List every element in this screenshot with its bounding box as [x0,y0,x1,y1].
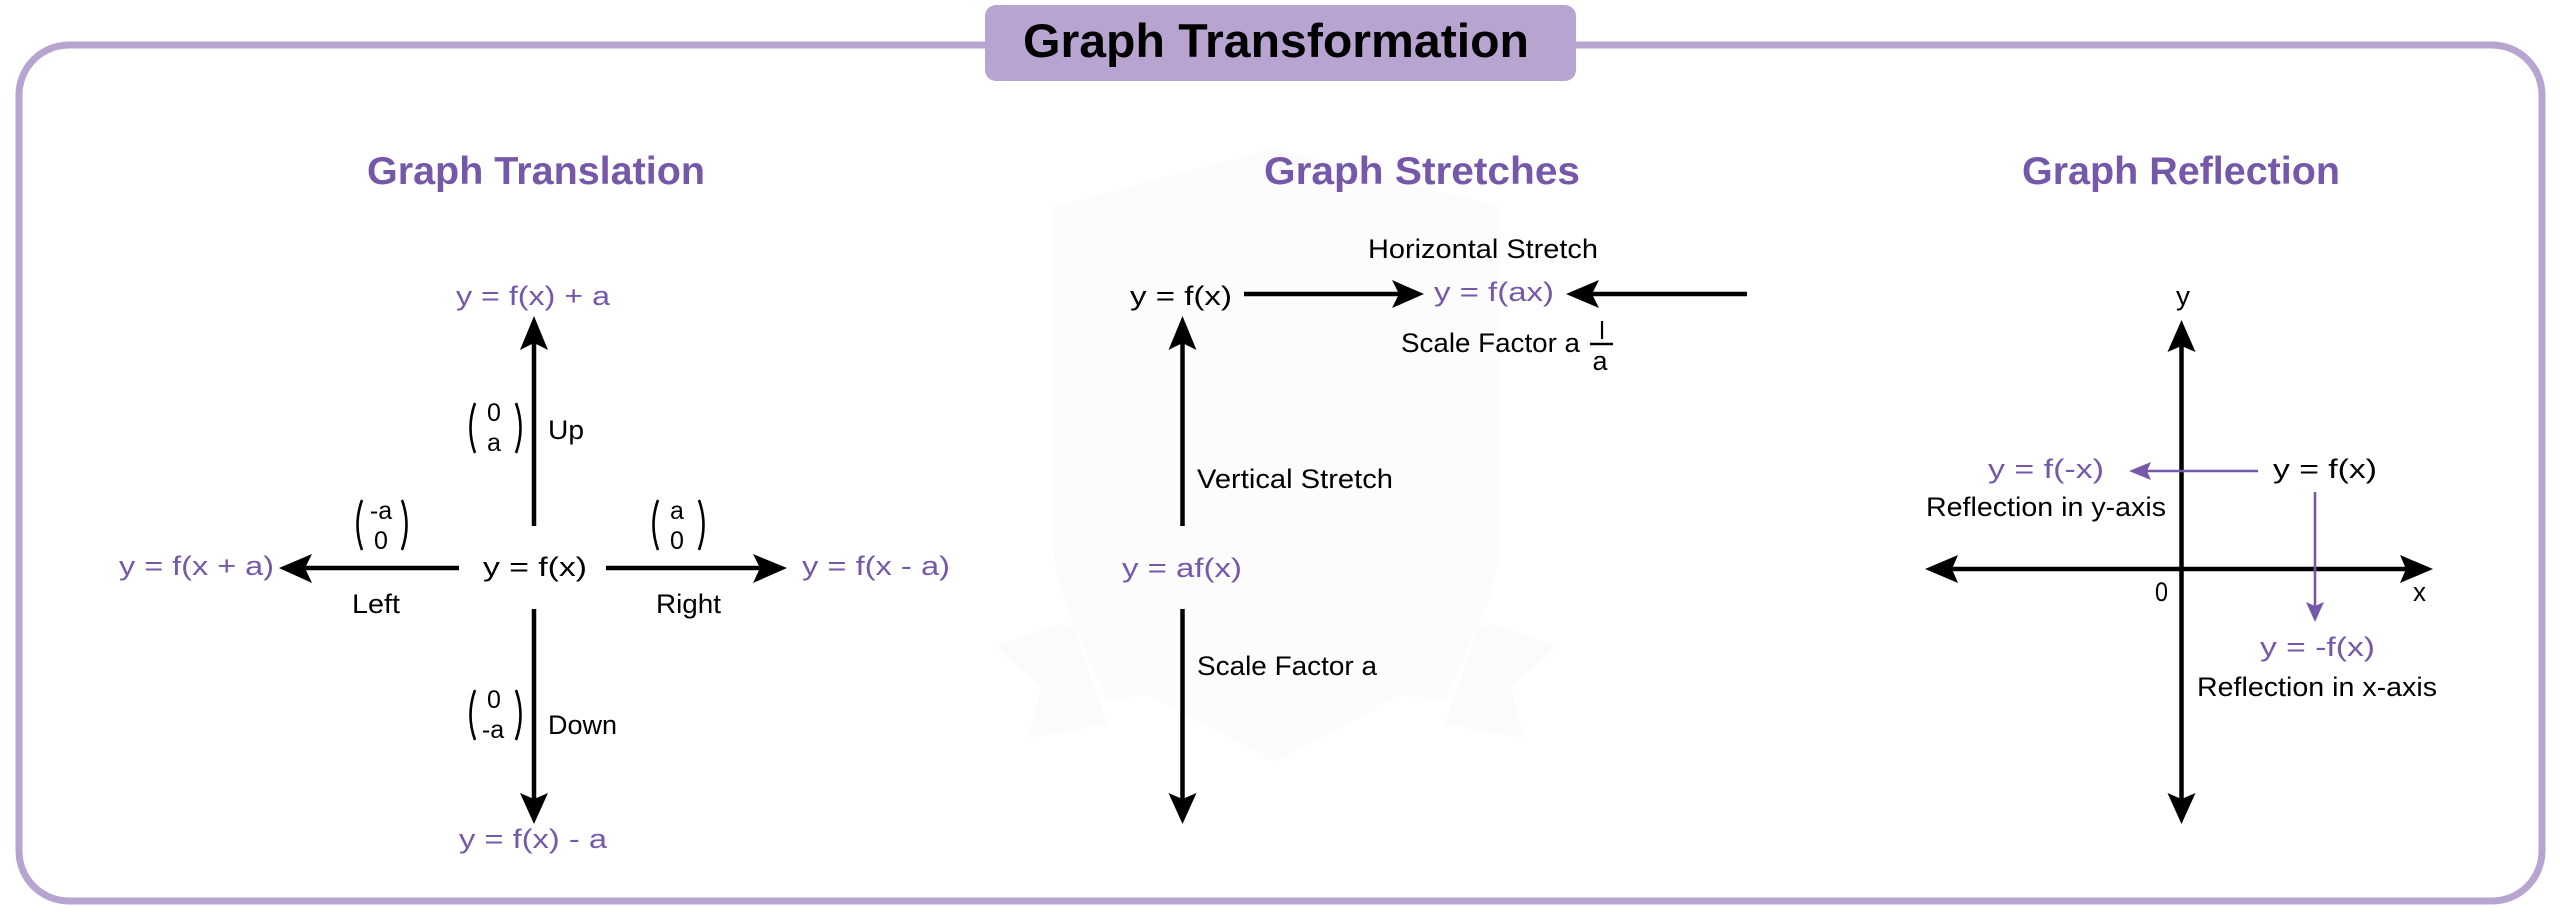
label: scale factor a: Scale Factor a [1197,651,1378,681]
axis label x: x [2413,577,2426,607]
title banner: Graph Transformation [1023,14,1529,67]
vector left [358,497,406,555]
arrow left [279,554,459,583]
x reflection result: y = -f(x) [2260,632,2375,662]
heading: graph reflection: Graph Reflection [2022,150,2340,193]
axis label y: y [2176,281,2191,311]
y reflection result: y = f(-x) [1988,454,2104,484]
heading: graph stretches: Graph Stretches [1264,150,1580,193]
arrow up to source [1168,316,1196,526]
vertical stretch result: y = af(x) [1122,553,1242,583]
vector up: a [487,429,501,457]
label: scale factor 1/a: Scale Factor a [1401,328,1581,358]
watermark shield [996,148,1556,762]
vector right [654,497,704,555]
origin label: 0 [2155,577,2168,607]
label: reflection in x-axis: Reflection in x-axis [2197,672,2437,702]
vector down: -a [482,716,504,744]
y axis [2168,320,2196,824]
label: horizontal stretch: Horizontal Stretch [1368,234,1598,264]
title banner [985,5,1576,81]
arrow left to horizontal stretch [1566,280,1747,308]
vector left: 0 [374,527,388,555]
x axis [1925,555,2433,583]
purple arrow to y reflection [2129,462,2258,480]
vector right: 0 [670,527,684,555]
label: vertical stretch: Vertical Stretch [1197,464,1393,494]
label: scale factor 1/a [1401,317,1613,376]
panel: graph translation [119,150,950,854]
label: scale factor 1/a: l [1599,317,1605,345]
label: scale factor 1/a: a [1592,346,1608,376]
vector left: -a [370,497,392,525]
centre label: y = f(x) [483,552,587,582]
label: right: Right [656,589,722,619]
vector up [470,399,520,457]
vector up: 0 [487,399,501,427]
source label: y = f(x) [1130,281,1232,311]
source label: y = f(x) [2273,454,2377,484]
horizontal stretch result: y = f(ax) [1434,277,1554,307]
panel: graph reflection [1925,150,2437,824]
arrow down [1168,609,1196,824]
arrow right [606,554,787,583]
label: up: Up [548,415,584,445]
vector right: a [670,497,684,525]
label: down: Down [548,710,617,740]
panel: graph stretches [1122,150,1747,824]
label: down result: y = f(x) - a [459,824,608,854]
purple arrow to x reflection [2306,492,2324,622]
heading: graph translation: Graph Translation [367,150,705,193]
vector down: 0 [487,686,501,714]
label: reflection in y-axis: Reflection in y-axis [1926,492,2166,522]
arrow right to horizontal stretch [1244,280,1424,308]
arrow down [520,609,548,824]
label: left: Left [352,589,401,619]
label: right result: y = f(x - a) [802,551,950,581]
arrow up [520,316,548,526]
vector down [470,686,520,744]
label: up result: y = f(x) + a [456,281,611,311]
label: left result: y = f(x + a) [119,551,274,581]
